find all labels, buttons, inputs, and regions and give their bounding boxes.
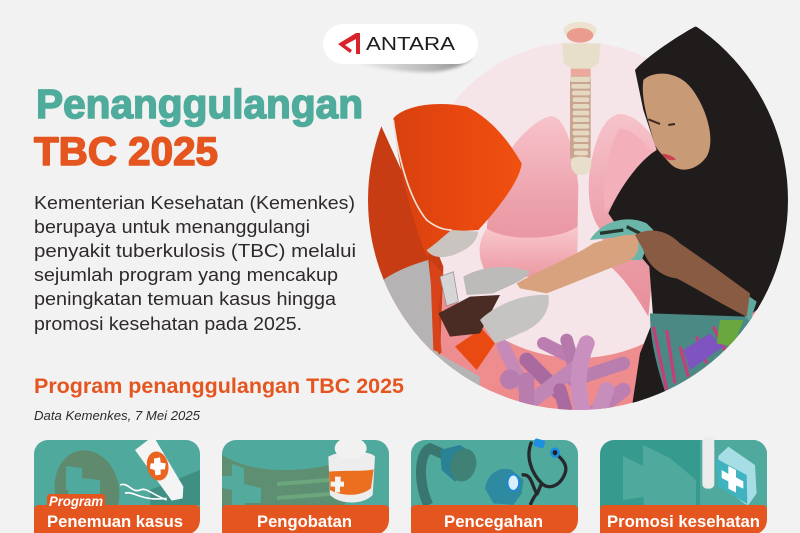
intro text: berupaya untuk menanggulangi [34, 216, 310, 237]
program caption: Program [49, 493, 103, 509]
card: Penemuan kasus [34, 436, 200, 533]
card title: Promosi kesehatan [607, 513, 760, 531]
card title: Pencegahan [444, 513, 543, 531]
label tag: Program [47, 494, 105, 508]
label band [222, 505, 389, 533]
logo mark [338, 33, 360, 54]
label band [34, 505, 200, 533]
logo wordmark: ANTARA [366, 33, 456, 54]
nurse [367, 104, 549, 400]
patient [517, 27, 800, 408]
illustration: lungs [480, 114, 660, 317]
title: TBC 2025 [34, 130, 218, 174]
icon: stethoscope [421, 438, 566, 505]
source note: Data Kemenkes, 7 Mei 2025 [34, 409, 200, 423]
card title: Penemuan kasus [47, 513, 183, 531]
card: Pencegahan [411, 438, 578, 533]
title: Penanggulangan [36, 81, 363, 127]
intro text: promosi kesehatan pada 2025. [34, 313, 302, 334]
icon: health sign [702, 437, 757, 505]
card: Promosi kesehatan [600, 437, 767, 533]
photo circle: nurse and patient with lungs [367, 0, 800, 417]
logo pill [323, 24, 478, 72]
icon: medicine bottle [328, 437, 375, 502]
label band [600, 505, 767, 533]
card title: Pengobatan [257, 513, 352, 531]
intro text [34, 192, 356, 334]
intro text: Kementerian Kesehatan (Kemenkes) [34, 192, 355, 213]
section heading: Program penanggulangan TBC 2025 [34, 375, 404, 398]
illustration: trachea [562, 22, 601, 175]
icon: medical tag [120, 436, 183, 501]
intro text: sejumlah program yang mencakup [34, 264, 338, 285]
intro text: peningkatan temuan kasus hingga [34, 288, 337, 309]
illustration: bacteria [500, 340, 623, 417]
title [34, 81, 363, 174]
card: Pengobatan [222, 437, 389, 533]
intro text: penyakit tuberkulosis (TBC) melalui [34, 240, 356, 261]
label band [411, 505, 578, 533]
